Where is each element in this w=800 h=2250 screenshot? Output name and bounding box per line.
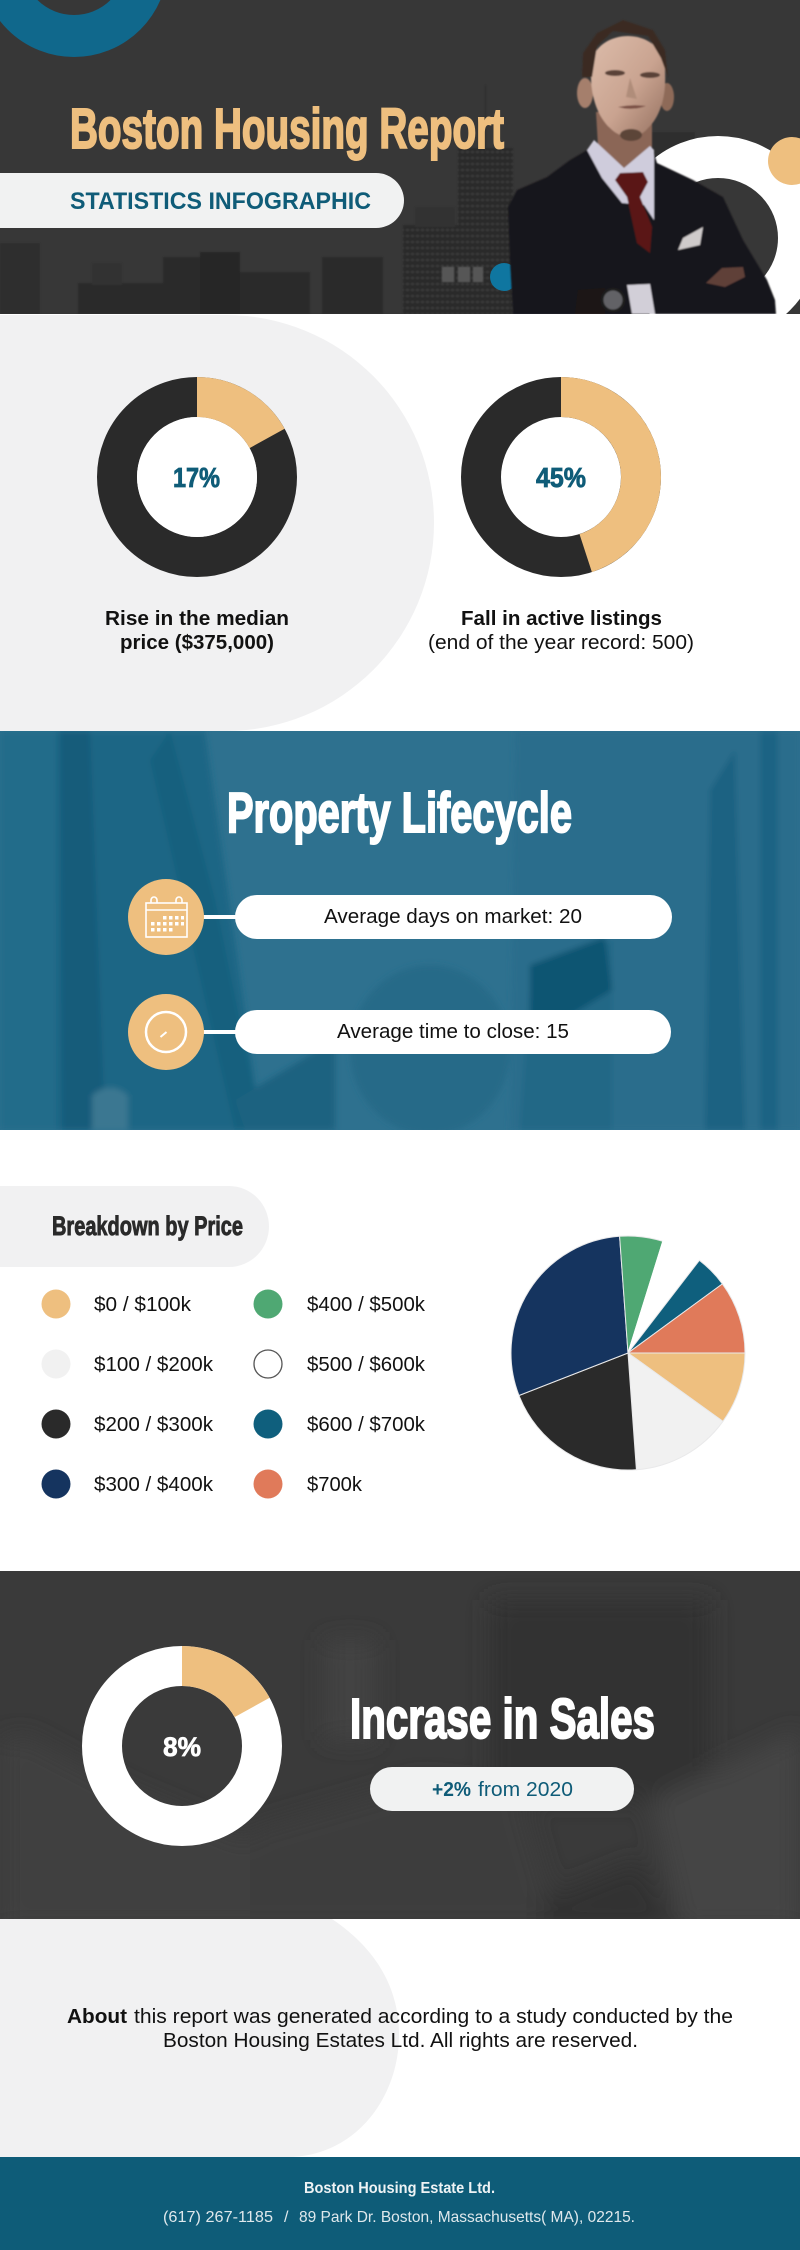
stat label: active listings: Fall in active listings <box>461 608 662 630</box>
row: days on market <box>128 879 672 955</box>
legend <box>42 1290 426 1498</box>
decorative white ring <box>637 157 799 319</box>
panel: about <box>0 1919 733 2157</box>
contact details: (617) 267-1185 <box>163 2209 273 2226</box>
stat label: median price: Rise in the median <box>105 608 289 630</box>
legend: $600 / $700k <box>307 1414 426 1436</box>
company name: Boston Housing Estate Ltd. <box>304 2180 495 2197</box>
panel: increase in sales <box>0 1571 800 1930</box>
row: days on market: Average days on market: 20 <box>324 906 582 928</box>
donut chart: 17%: 17% <box>173 462 220 493</box>
about text: this report was generated according to a study conducted by the <box>134 2006 733 2028</box>
contact details: / <box>284 2209 289 2226</box>
decorative teal dot <box>490 263 512 291</box>
street photo backdrop <box>0 731 800 1135</box>
panel: header <box>0 0 800 319</box>
contact details: 89 Park Dr. Boston, Massachusetts( MA), 02215. <box>299 2209 635 2226</box>
contact details <box>163 2209 635 2226</box>
decorative teal ring <box>1 0 147 36</box>
grey background blob <box>0 1919 399 2157</box>
heading pill <box>0 1186 269 1267</box>
panel: property lifecycle <box>0 731 800 1135</box>
pie chart <box>511 1236 745 1470</box>
about text: Boston Housing Estates Ltd. All rights are reserved. <box>163 2030 638 2052</box>
donut chart: 45% <box>481 377 661 572</box>
city skyline <box>2 134 694 314</box>
about text <box>67 2006 733 2052</box>
subtitle pill <box>0 173 404 228</box>
heading: Incrase in Sales <box>350 1687 655 1751</box>
legend: $200 / $300k <box>94 1414 214 1436</box>
heading: Property Lifecycle <box>227 781 572 845</box>
stat label: median price <box>105 608 289 654</box>
panel: breakdown by price <box>0 1186 745 1498</box>
decorative tan dot <box>768 137 800 185</box>
businessman portrait <box>508 20 776 314</box>
legend: $100 / $200k <box>94 1354 214 1376</box>
donut chart: 45%: 45% <box>536 462 586 493</box>
donut chart: 8% <box>102 1646 270 1826</box>
stat label: median price: price ($375,000) <box>120 632 274 654</box>
legend: $300 / $400k <box>94 1474 214 1496</box>
stat label: active listings: (end of the year record: 500) <box>428 632 694 654</box>
change pill: +2% <box>432 1779 471 1801</box>
donut chart: 17% <box>117 377 285 557</box>
stat label: active listings <box>428 608 694 654</box>
title: Boston Housing Report <box>70 97 504 161</box>
icon: clock <box>146 1012 186 1052</box>
icon: calendar <box>146 897 187 937</box>
about text: About <box>67 2006 127 2028</box>
legend: $0 / $100k <box>94 1294 192 1316</box>
row: time to close: Average time to close: 15 <box>337 1021 569 1043</box>
legend: $700k <box>307 1474 363 1496</box>
heading pill: Breakdown by Price <box>52 1211 243 1241</box>
donut chart: 8%: 8% <box>163 1732 201 1762</box>
grey background blob <box>0 315 434 731</box>
legend: $400 / $500k <box>307 1294 426 1316</box>
change pill <box>370 1767 634 1811</box>
change pill: from 2020 <box>478 1779 573 1801</box>
panel: stat donuts <box>0 315 694 731</box>
row: time to close <box>128 994 671 1070</box>
subtitle pill: STATISTICS INFOGRAPHIC <box>70 188 371 215</box>
legend: $500 / $600k <box>307 1354 426 1376</box>
handshake photo backdrop <box>336 1608 794 1919</box>
panel: footer <box>0 2157 800 2250</box>
